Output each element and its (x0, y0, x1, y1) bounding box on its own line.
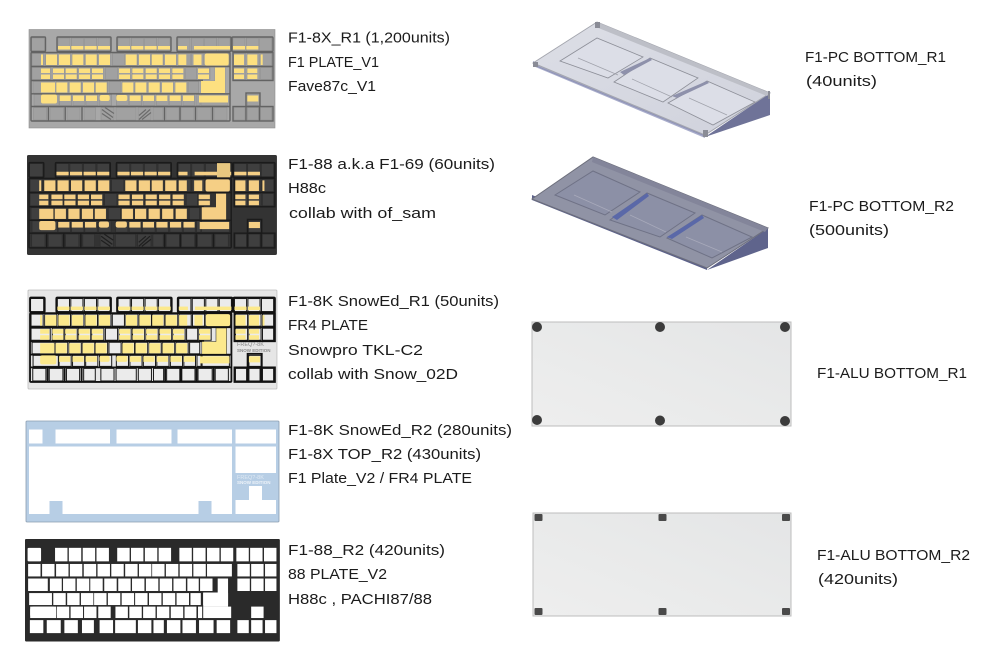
label: F1-88: collab with of_sam (289, 205, 436, 222)
label: F1-PC BOTTOM_R2: F1-PC BOTTOM_R2 (809, 198, 954, 215)
label: F1-88_R2: F1-88_R2 (420units) (288, 542, 445, 559)
label: F1-PC BOTTOM_R2 (809, 198, 954, 239)
label: F1-8K SnowEd_R1: collab with Snow_02D (288, 366, 458, 383)
label: F1-8X_R1: Fave87c_V1 (288, 78, 376, 95)
label: F1-88 (288, 156, 495, 222)
keyboard plate: F1-8X_R1 (29, 30, 275, 128)
label: F1-PC BOTTOM_R1 (805, 49, 946, 90)
label: F1-8K SnowEd_R2 (288, 422, 512, 487)
label: F1-8K SnowEd_R2: F1 Plate_V2 / FR4 PLATE (288, 470, 472, 487)
label: F1-ALU BOTTOM_R2 (817, 547, 970, 588)
label: F1-8X_R1: F1 PLATE_V1 (288, 54, 379, 71)
label: F1-8K SnowEd_R2: F1-8X TOP_R2 (430units) (288, 446, 481, 463)
label: F1-8K SnowEd_R1: FR4 PLATE (288, 317, 368, 334)
label: F1-8K SnowEd_R2: F1-8K SnowEd_R2 (280units) (288, 422, 512, 439)
plate marking: snow edition: SNOW EDITION (237, 348, 270, 353)
top frame: F1-8K SnowEd_R2: SNOW EDITION (237, 480, 270, 485)
label: F1-8X_R1 (288, 30, 450, 95)
label: F1-88: F1-88 a.k.a F1-69 (60units) (288, 156, 495, 173)
label: F1-88_R2: H88c , PACHI87/88 (288, 591, 432, 608)
label: F1-PC BOTTOM_R2: (500units) (809, 222, 889, 239)
plate marking: snow edition: FREQ?-8K (237, 342, 264, 348)
keyboard plate: F1-88 a.k.a F1-69 (27, 155, 277, 255)
label: F1-ALU BOTTOM_R2: F1-ALU BOTTOM_R2 (817, 547, 970, 564)
label: F1-8K SnowEd_R1 (288, 293, 499, 383)
aluminium bottom: F1-ALU BOTTOM_R2 (533, 513, 791, 616)
label: F1-8X_R1: F1-8X_R1 (1,200units) (288, 30, 450, 46)
top frame: F1-8K SnowEd_R2: FREQ?-8K (237, 475, 264, 481)
top frame: F1-8K SnowEd_R2 (26, 421, 279, 522)
aluminium bottom: F1-ALU BOTTOM_R1 (532, 322, 791, 426)
label: F1-8K SnowEd_R1: F1-8K SnowEd_R1 (50units) (288, 293, 499, 310)
label: F1-88_R2: 88 PLATE_V2 (288, 566, 387, 583)
plate marking: snow edition (237, 342, 270, 353)
keyboard plate: F1-88_R2 (25, 539, 280, 641)
polycarbonate bottom: F1-PC BOTTOM_R2 (532, 157, 768, 270)
keyboard plate: F1-8K SnowEd_R1 (28, 290, 277, 389)
label: F1-ALU BOTTOM_R1: F1-ALU BOTTOM_R1 (817, 365, 967, 382)
label: F1-88_R2 (288, 542, 445, 608)
label: F1-88: H88c (288, 180, 327, 197)
polycarbonate bottom: F1-PC BOTTOM_R1 (533, 22, 770, 138)
label: F1-PC BOTTOM_R1: (40units) (806, 73, 877, 90)
label: F1-ALU BOTTOM_R2: (420units) (818, 571, 898, 588)
label: F1-8K SnowEd_R1: Snowpro TKL-C2 (288, 342, 423, 359)
label: F1-PC BOTTOM_R1: F1-PC BOTTOM_R1 (805, 49, 946, 66)
